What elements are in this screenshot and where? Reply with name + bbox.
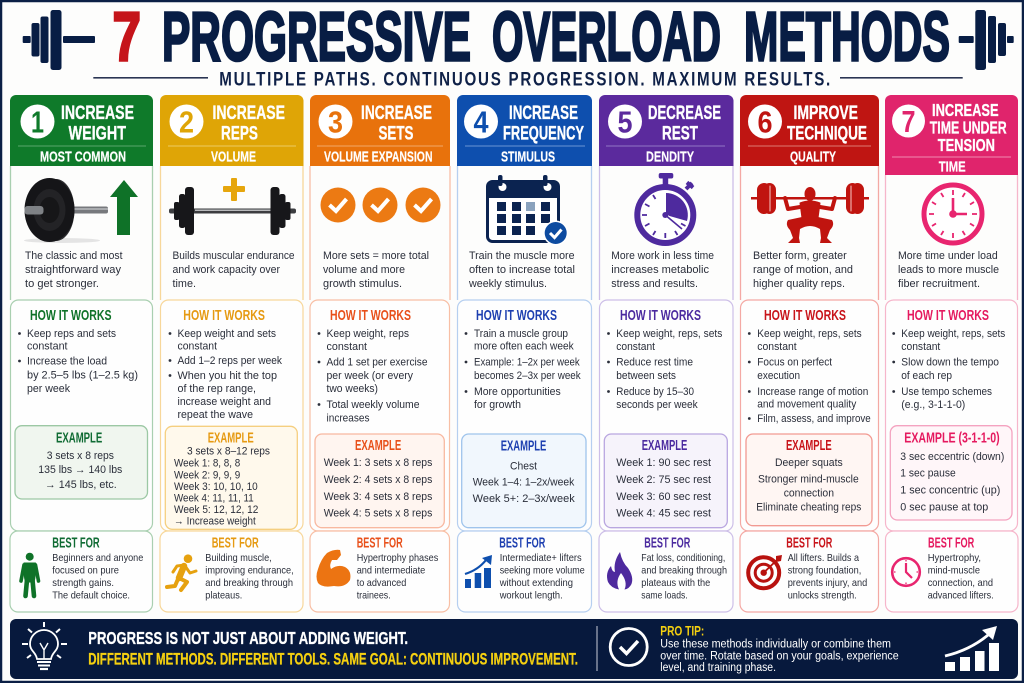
description: straightforward way bbox=[25, 264, 121, 276]
example box: Week 4: 45 sec rest bbox=[616, 508, 711, 520]
best for panel bbox=[10, 531, 152, 612]
how it works panel bbox=[740, 300, 878, 531]
description bbox=[172, 250, 294, 290]
description: The classic and most bbox=[25, 250, 122, 262]
how it works panel: Example: 1–2x per week bbox=[474, 357, 580, 369]
panel: method 3 increase sets bbox=[310, 95, 450, 612]
example box bbox=[746, 434, 872, 526]
how it works panel: HOW IT WORKS bbox=[764, 307, 846, 324]
description: increases metabolic bbox=[611, 264, 709, 276]
how it works panel: increase weight and bbox=[178, 396, 271, 408]
example box: EXAMPLE bbox=[355, 437, 401, 454]
how it works panel: Reduce by 15–30 bbox=[616, 386, 694, 398]
header: improve technique: IMPROVE bbox=[794, 102, 858, 124]
how it works panel: constant bbox=[27, 340, 68, 352]
example box: Eliminate cheating reps bbox=[756, 502, 862, 514]
panel: method 1 increase weight bbox=[10, 95, 153, 612]
description bbox=[25, 250, 122, 290]
how it works panel: Add 1–2 reps per week bbox=[178, 355, 283, 367]
best for panel bbox=[886, 531, 1018, 612]
best for panel: BEST FOR bbox=[499, 534, 545, 551]
description bbox=[323, 250, 429, 290]
header: increase frequency: FREQUENCY bbox=[503, 122, 584, 144]
example box: → 145 lbs, etc. bbox=[45, 479, 117, 491]
best for panel bbox=[310, 531, 450, 612]
example box: EXAMPLE bbox=[208, 430, 254, 447]
best for panel: strong foundation, bbox=[788, 566, 861, 577]
how it works panel: HOW IT WORKS bbox=[907, 307, 989, 324]
best for panel: BEST FOR bbox=[644, 534, 690, 551]
how it works panel: by 2.5–5 lbs (1–2.5 kg) bbox=[27, 370, 138, 382]
best for panel: strength gains. bbox=[52, 578, 114, 589]
header: increase sets: VOLUME EXPANSION bbox=[324, 148, 432, 165]
card frame bbox=[740, 166, 878, 300]
best for panel: unlocks strength. bbox=[788, 590, 857, 601]
how it works panel: Film, assess, and improve bbox=[757, 413, 871, 425]
how it works panel: Reduce rest time bbox=[616, 357, 693, 369]
how it works panel: Total weekly volume bbox=[326, 399, 420, 411]
header: increase sets: SETS bbox=[378, 122, 414, 144]
description bbox=[611, 250, 714, 290]
how it works panel: of the rep range, bbox=[178, 383, 256, 395]
best for panel: BEST FOR bbox=[357, 534, 403, 551]
footer message bbox=[88, 628, 578, 668]
header: increase reps: INCREASE bbox=[212, 102, 285, 124]
header: increase frequency: INCREASE bbox=[509, 102, 578, 124]
best for panel: to advanced bbox=[357, 578, 407, 589]
how it works panel: becomes 2–3x per week bbox=[474, 370, 581, 382]
header: improve technique: 6 bbox=[758, 104, 772, 140]
how it works panel: between sets bbox=[616, 370, 677, 382]
header: increase frequency: STIMULUS bbox=[501, 148, 555, 165]
how it works panel: HOW IT WORKS bbox=[476, 307, 557, 324]
example box bbox=[462, 434, 586, 528]
icon: clock bbox=[924, 185, 982, 243]
best for panel bbox=[160, 531, 303, 612]
how it works panel: for growth bbox=[474, 399, 521, 411]
example box: Week 3: 10, 10, 10 bbox=[174, 481, 258, 493]
example box: 1 sec pause bbox=[900, 468, 956, 480]
icon: barbell with plus bbox=[169, 178, 296, 235]
description: stress and results. bbox=[611, 278, 698, 290]
example box: Week 4: 5 sets x 8 reps bbox=[324, 508, 433, 520]
header: decrease rest: REST bbox=[662, 122, 698, 144]
header: increase time under tension: INCREASE bbox=[932, 100, 999, 120]
best for panel: Fat loss, conditioning, bbox=[641, 553, 725, 564]
best for panel: improving endurance, bbox=[205, 566, 294, 577]
footer message: PROGRESS IS NOT JUST ABOUT ADDING WEIGHT. bbox=[88, 628, 408, 648]
icon: calendar with check badge bbox=[487, 175, 568, 246]
example box: Week 3: 4 sets x 8 reps bbox=[324, 491, 433, 503]
example box: Week 2: 75 sec rest bbox=[616, 474, 711, 486]
how it works panel: per week (or every bbox=[326, 370, 414, 382]
description: higher quality reps. bbox=[753, 278, 845, 290]
card frame bbox=[600, 166, 733, 300]
best for panel: same loads. bbox=[641, 590, 688, 601]
icon: stopwatch bbox=[637, 173, 694, 243]
description: volume and more bbox=[323, 264, 405, 276]
how it works panel bbox=[600, 300, 733, 531]
example box: Chest bbox=[510, 461, 537, 473]
how it works panel: Keep reps and sets bbox=[27, 328, 117, 340]
card frame bbox=[160, 166, 303, 300]
icon: three check circles bbox=[320, 188, 440, 222]
best for panel: Hypertrophy, bbox=[928, 553, 981, 564]
best for panel: trainees. bbox=[357, 590, 391, 601]
best for panel: Beginners and anyone bbox=[52, 553, 144, 564]
header: increase weight: MOST COMMON bbox=[40, 148, 126, 165]
header: increase frequency: 4 bbox=[474, 104, 489, 140]
best for panel bbox=[458, 531, 592, 612]
best for panel bbox=[740, 531, 878, 612]
description: More work in less time bbox=[611, 250, 714, 262]
example box: 0 sec pause at top bbox=[900, 501, 988, 513]
description: to get stronger. bbox=[25, 278, 99, 290]
icon: flame bbox=[607, 552, 632, 590]
card frame bbox=[458, 166, 592, 300]
panel: method 4 increase frequency bbox=[457, 95, 592, 612]
pro tip: level, and training phase. bbox=[660, 662, 776, 674]
icon: target with dart bbox=[748, 555, 782, 588]
example box: Week 1: 8, 8, 8 bbox=[174, 458, 240, 470]
icon: left barbell bbox=[23, 10, 95, 70]
header: increase weight bbox=[10, 95, 153, 166]
how it works panel: Keep weight, reps bbox=[326, 328, 410, 340]
how it works panel bbox=[458, 300, 592, 531]
example box: Week 4: 11, 11, 11 bbox=[174, 492, 254, 504]
description bbox=[898, 250, 999, 290]
how it works panel: HOW IT WORKS bbox=[30, 307, 112, 324]
how it works panel bbox=[886, 300, 1018, 531]
how it works panel: Add 1 set per exercise bbox=[326, 357, 428, 369]
best for panel: plateaus with the bbox=[641, 578, 711, 589]
header: decrease rest: 5 bbox=[618, 104, 632, 140]
header: increase reps: 2 bbox=[179, 104, 194, 140]
how it works panel: seconds per week bbox=[616, 399, 698, 411]
how it works panel: two weeks) bbox=[326, 383, 378, 395]
footer message: DIFFERENT METHODS. DIFFERENT TOOLS. SAME GOAL: CONTINUOUS IMPROVEMENT. bbox=[88, 650, 578, 668]
card frame bbox=[310, 166, 450, 300]
description: leads to more muscle bbox=[898, 264, 999, 276]
how it works panel: Train a muscle group bbox=[474, 328, 568, 340]
header: decrease rest: DENDITY bbox=[646, 148, 694, 165]
example box: Week 2: 4 sets x 8 reps bbox=[324, 474, 433, 486]
example box: 135 lbs → 140 lbs bbox=[38, 464, 123, 476]
best for panel: All lifters. Builds a bbox=[788, 553, 859, 564]
example box: Deeper squats bbox=[775, 457, 843, 469]
header: increase weight: WEIGHT bbox=[68, 122, 126, 144]
header: increase reps bbox=[160, 95, 304, 166]
example box: 3 sets x 8–12 reps bbox=[187, 446, 271, 458]
example box: → Increase weight bbox=[174, 515, 256, 527]
best for panel: BEST FOR bbox=[928, 534, 974, 551]
card frame bbox=[10, 166, 152, 300]
example box: Week 1: 90 sec rest bbox=[616, 457, 711, 469]
example box bbox=[165, 426, 297, 529]
how it works panel bbox=[10, 300, 152, 531]
best for panel: BEST FOR bbox=[212, 534, 259, 551]
header: decrease rest bbox=[599, 95, 734, 166]
description: Train the muscle more bbox=[469, 250, 574, 262]
header: increase reps: VOLUME bbox=[211, 148, 256, 165]
pro tip bbox=[660, 622, 899, 674]
pro tip: over time. Rotate based on your goals, experience bbox=[660, 650, 899, 662]
how it works panel: Keep weight and sets bbox=[178, 328, 277, 340]
header: increase weight: 1 bbox=[31, 104, 44, 140]
how it works panel: (e.g., 3-1-1-0) bbox=[901, 399, 965, 411]
header: improve technique: QUALITY bbox=[790, 148, 836, 165]
how it works panel: constant bbox=[178, 340, 217, 352]
icon: squat with barbell bbox=[751, 183, 869, 243]
icon: runner bbox=[167, 554, 196, 590]
how it works panel: Use tempo schemes bbox=[901, 386, 993, 398]
header: increase time under tension: TIME bbox=[939, 158, 966, 176]
description bbox=[753, 250, 853, 290]
example box: EXAMPLE bbox=[56, 430, 102, 447]
header: decrease rest: DECREASE bbox=[648, 102, 721, 124]
how it works panel: constant bbox=[616, 341, 655, 353]
best for panel: advanced lifters. bbox=[928, 590, 994, 601]
how it works panel: repeat the wave bbox=[178, 409, 253, 421]
best for panel: seeking more volume bbox=[500, 566, 585, 577]
example box: 3 sets x 8 reps bbox=[47, 450, 115, 462]
best for panel: and intermediate bbox=[357, 566, 426, 577]
icon: check circle bbox=[610, 628, 647, 666]
example box bbox=[315, 434, 444, 528]
how it works panel: Slow down the tempo bbox=[901, 356, 999, 368]
how it works panel: constant bbox=[326, 341, 367, 353]
example box: Week 5: 12, 12, 12 bbox=[174, 504, 258, 516]
description: and work capacity over bbox=[172, 264, 280, 276]
panel: method 6 improve technique bbox=[740, 95, 879, 612]
example box: connection bbox=[784, 487, 834, 499]
example box: Week 5+: 2–3x/week bbox=[473, 493, 575, 505]
best for panel: workout length. bbox=[499, 590, 563, 601]
icon: weight plate and up arrow bbox=[24, 178, 138, 243]
best for panel: The default choice. bbox=[52, 590, 130, 601]
how it works panel: HOW IT WORKS bbox=[620, 307, 701, 324]
how it works panel bbox=[310, 300, 450, 531]
icon: rising bar chart bbox=[465, 555, 492, 588]
how it works panel: constant bbox=[757, 341, 797, 353]
description: time. bbox=[172, 278, 196, 290]
panel: method 7 increase time under tension bbox=[885, 95, 1018, 612]
example box: EXAMPLE bbox=[642, 437, 687, 454]
description bbox=[468, 250, 575, 290]
footer banner bbox=[10, 619, 1018, 679]
header: increase time under tension bbox=[885, 95, 1018, 176]
panel: method 5 decrease rest bbox=[599, 95, 734, 612]
best for panel: plateaus. bbox=[205, 590, 242, 601]
header: increase reps: REPS bbox=[221, 122, 258, 144]
header: increase time under tension: 7 bbox=[902, 104, 916, 139]
best for panel: and breaking through bbox=[641, 566, 727, 577]
example box: Week 3: 60 sec rest bbox=[616, 491, 711, 503]
best for panel: Building muscle, bbox=[205, 553, 272, 564]
best for panel: without extending bbox=[499, 578, 573, 589]
description: often to increase total bbox=[469, 264, 575, 276]
pro tip: PRO TIP: bbox=[660, 622, 704, 638]
description: fiber recruitment. bbox=[898, 278, 980, 290]
header: increase weight: INCREASE bbox=[61, 102, 134, 124]
description: growth stimulus. bbox=[323, 278, 402, 290]
icon: growth chart bbox=[945, 626, 999, 671]
best for panel: prevents injury, and bbox=[788, 578, 868, 589]
header: increase sets: 3 bbox=[328, 104, 343, 140]
example box: Week 1–4: 1–2x/week bbox=[473, 477, 575, 489]
icon: person bbox=[21, 553, 38, 596]
how it works panel: HOW IT WORKS bbox=[183, 307, 265, 324]
best for panel bbox=[599, 531, 733, 612]
example box: 1 sec concentric (up) bbox=[900, 484, 1000, 496]
description: Better form, greater bbox=[753, 250, 847, 262]
header: improve technique bbox=[740, 95, 879, 166]
best for panel: Intermediate+ lifters bbox=[500, 553, 582, 564]
header: increase sets: INCREASE bbox=[361, 102, 432, 124]
how it works panel: per week bbox=[27, 383, 71, 395]
card frame bbox=[886, 175, 1018, 300]
best for panel: BEST FOR bbox=[52, 534, 100, 551]
how it works panel: Keep weight, reps, sets bbox=[901, 328, 1006, 340]
description: range of motion, and bbox=[753, 264, 853, 276]
description: More time under load bbox=[898, 250, 998, 262]
example box bbox=[604, 434, 727, 528]
how it works panel: execution bbox=[757, 370, 800, 382]
best for panel: BEST FOR bbox=[786, 534, 832, 551]
icon: lightbulb bbox=[22, 622, 67, 669]
subtitle: MULTIPLE PATHS. CONTINUOUS PROGRESSION. MAXIMUM RESULTS. bbox=[219, 70, 832, 90]
how it works panel: increases bbox=[326, 413, 370, 425]
best for panel: and breaking through bbox=[205, 578, 293, 589]
description: More sets = more total bbox=[323, 250, 429, 262]
how it works panel: and movement quality bbox=[757, 398, 857, 410]
example box bbox=[15, 426, 148, 499]
how it works panel: More opportunities bbox=[474, 386, 561, 398]
icon: flexed bicep bbox=[316, 550, 350, 587]
title bbox=[112, 0, 950, 76]
how it works panel: Increase the load bbox=[27, 356, 107, 368]
best for panel: focused on pure bbox=[52, 566, 119, 577]
example box: 3 sec eccentric (down) bbox=[900, 451, 1004, 463]
how it works panel: Keep weight, reps, sets bbox=[757, 328, 862, 340]
how it works panel: Increase range of motion bbox=[757, 386, 868, 398]
how it works panel: constant bbox=[901, 341, 940, 353]
example box: EXAMPLE bbox=[786, 437, 832, 454]
description: weekly stimulus. bbox=[468, 278, 547, 290]
example box: Week 2: 9, 9, 9 bbox=[174, 469, 240, 481]
icon: right barbell bbox=[959, 10, 1014, 70]
icon: small clock bbox=[892, 558, 920, 586]
header: increase sets bbox=[310, 95, 450, 166]
example box: EXAMPLE bbox=[501, 438, 546, 455]
header: increase time under tension: TENSION bbox=[938, 135, 995, 155]
best for panel: Hypertrophy phases bbox=[357, 553, 438, 564]
how it works panel: Focus on perfect bbox=[757, 356, 832, 368]
how it works panel: HOW IT WORKS bbox=[330, 307, 411, 324]
example box: Stronger mind-muscle bbox=[758, 473, 859, 485]
how it works panel: of each rep bbox=[901, 370, 952, 382]
best for panel: mind-muscle bbox=[928, 566, 980, 577]
pro tip: Use these methods individually or combine them bbox=[660, 638, 891, 650]
example box: Week 1: 3 sets x 8 reps bbox=[324, 457, 433, 469]
description: Builds muscular endurance bbox=[172, 250, 294, 262]
header: improve technique: TECHNIQUE bbox=[787, 122, 867, 144]
how it works panel: more often each week bbox=[474, 340, 574, 352]
how it works panel: When you hit the top bbox=[178, 370, 277, 382]
header: increase frequency bbox=[457, 95, 592, 166]
panel: method 2 increase reps bbox=[160, 95, 304, 612]
how it works panel: Keep weight, reps, sets bbox=[616, 328, 723, 340]
how it works panel bbox=[160, 300, 303, 531]
best for panel: connection, and bbox=[928, 578, 993, 589]
example box bbox=[890, 426, 1012, 520]
